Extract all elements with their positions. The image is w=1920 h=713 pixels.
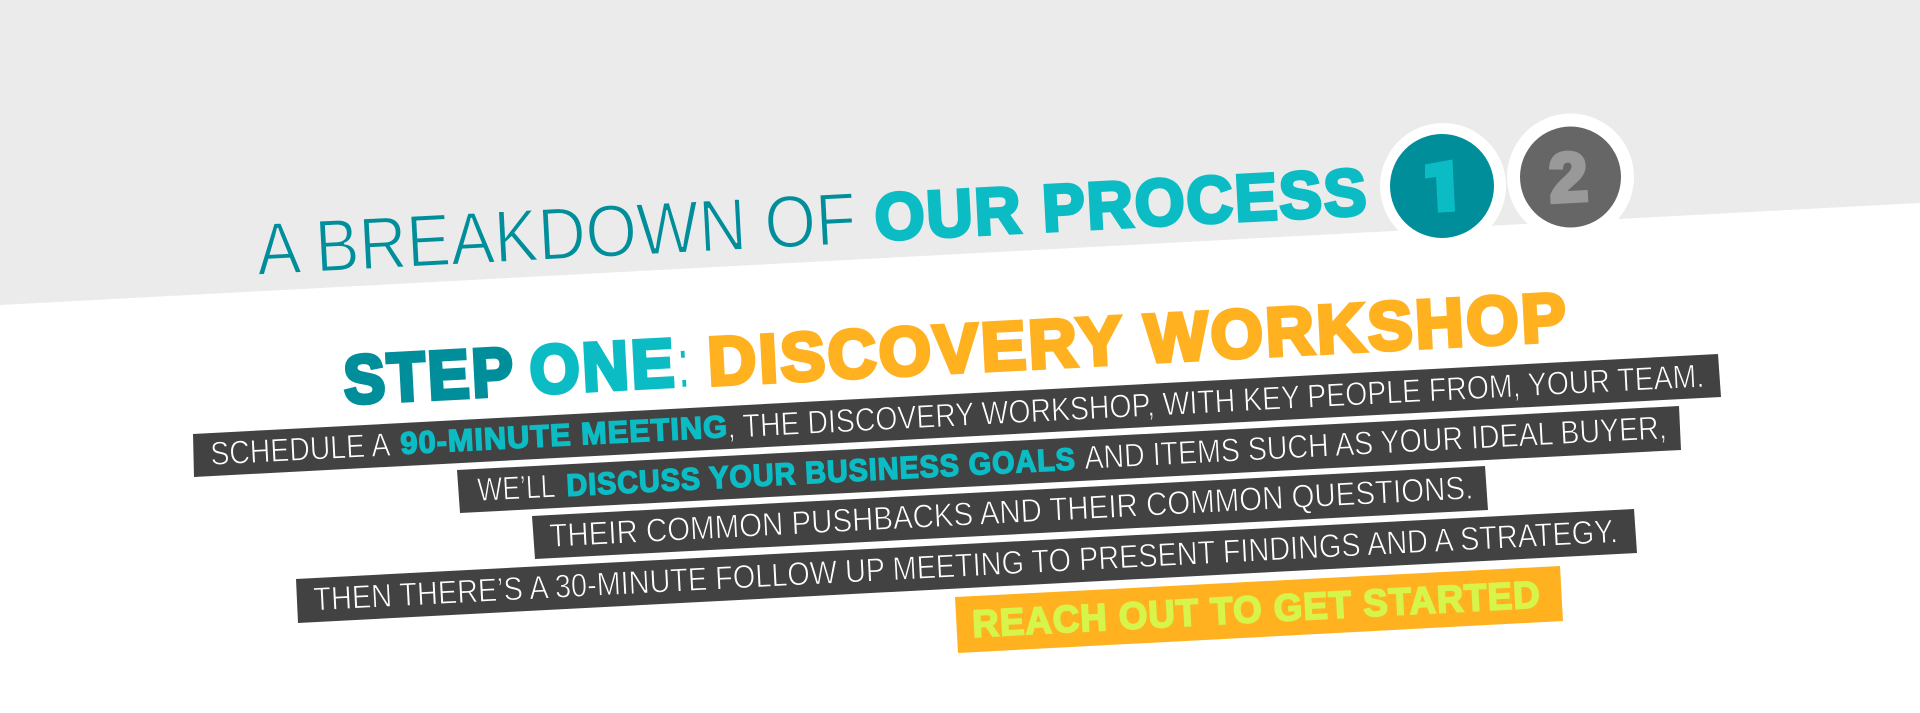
call to action button: REACH OUT TO GET STARTED (971, 574, 1542, 646)
title (254, 154, 1370, 291)
step indicator 1 (1380, 123, 1506, 249)
description line 2: WE’LL (476, 467, 556, 508)
description line 2: DISCUSS YOUR BUSINESS GOALS (566, 441, 1077, 503)
description line 4: THEN THERE’S A 30-MINUTE FOLLOW UP MEETING TO PRESENT FINDINGS AND A STRATEGY. (312, 512, 1619, 617)
grey slanted header band (0, 0, 1920, 305)
heading: step: STEP (342, 334, 518, 418)
description line 1: SCHEDULE A (209, 426, 391, 472)
step indicator 2 (1507, 114, 1634, 240)
title bold part: OUR PROCESS (873, 154, 1370, 254)
description line 2 (457, 406, 1681, 513)
description line 1: 90-MINUTE MEETING (400, 409, 729, 461)
heading (342, 279, 1571, 418)
step indicator 2: 2 (1547, 138, 1589, 217)
heading: discovery workshop: DISCOVERY WORKSHOP (706, 279, 1571, 400)
description line 1: , THE DISCOVERY WORKSHOP, WITH KEY PEOPLE FROM, YOUR TEAM. (726, 357, 1705, 445)
description line 2: AND ITEMS SUCH AS YOUR IDEAL BUYER, (1083, 409, 1668, 476)
heading: colon: : (676, 326, 691, 402)
description line 3: THEIR COMMON PUSHBACKS AND THEIR COMMON QUESTIONS. (548, 469, 1474, 554)
title light part: A BREAKDOWN OF (254, 177, 858, 291)
description line 1 (193, 354, 1721, 477)
heading: one: ONE (528, 325, 679, 408)
digit one: 1 (1419, 146, 1464, 231)
